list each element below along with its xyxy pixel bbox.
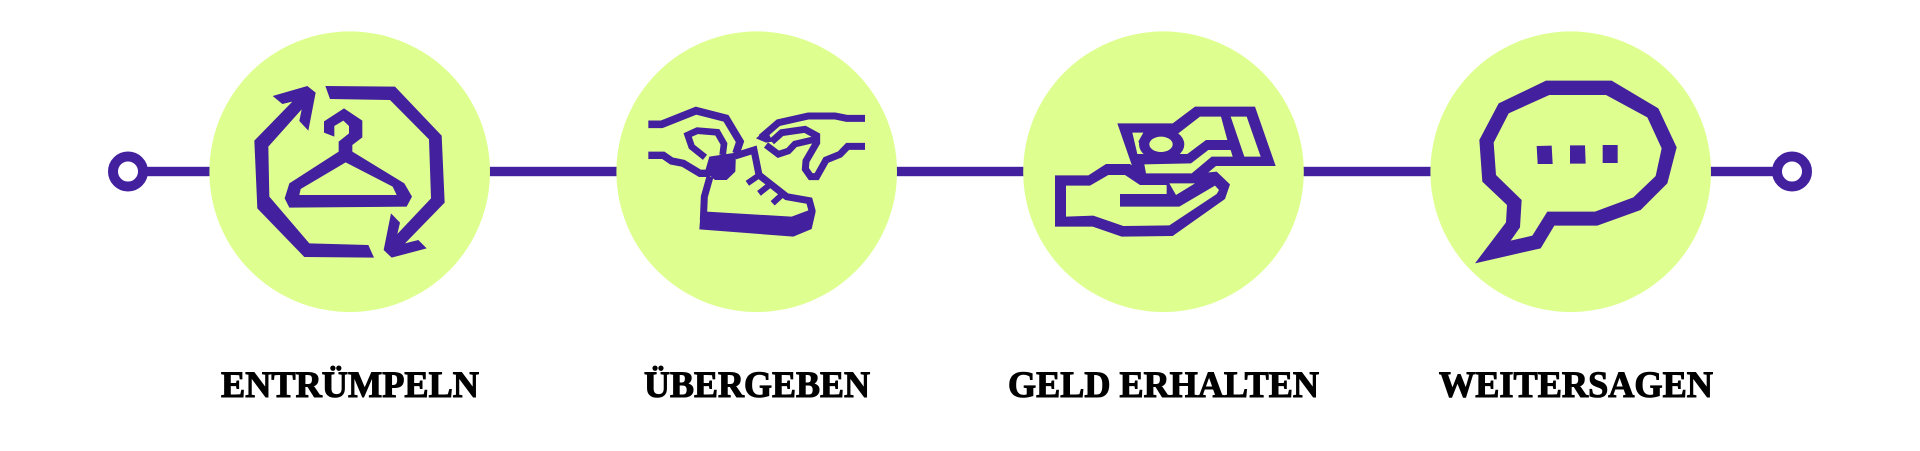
step 1: circle (209, 31, 490, 312)
label: Geld erhalten: GELD ERHALTEN (1008, 365, 1319, 406)
icon: hanger with recycling arrows (254, 86, 445, 258)
timeline (113, 156, 1807, 186)
label: Entrümpeln: ENTRÜMPELN (221, 365, 479, 406)
icon: speech bubble (1475, 81, 1677, 263)
label: Weitersagen: WEITERSAGEN (1439, 365, 1713, 406)
step 2: circle (616, 31, 897, 312)
label: Übergeben: ÜBERGEBEN (644, 365, 870, 406)
icon: hand receiving money (1055, 107, 1276, 237)
step 4: circle (1430, 31, 1711, 312)
icon: hands passing a shoe (648, 111, 865, 237)
step 3: circle (1023, 31, 1304, 312)
